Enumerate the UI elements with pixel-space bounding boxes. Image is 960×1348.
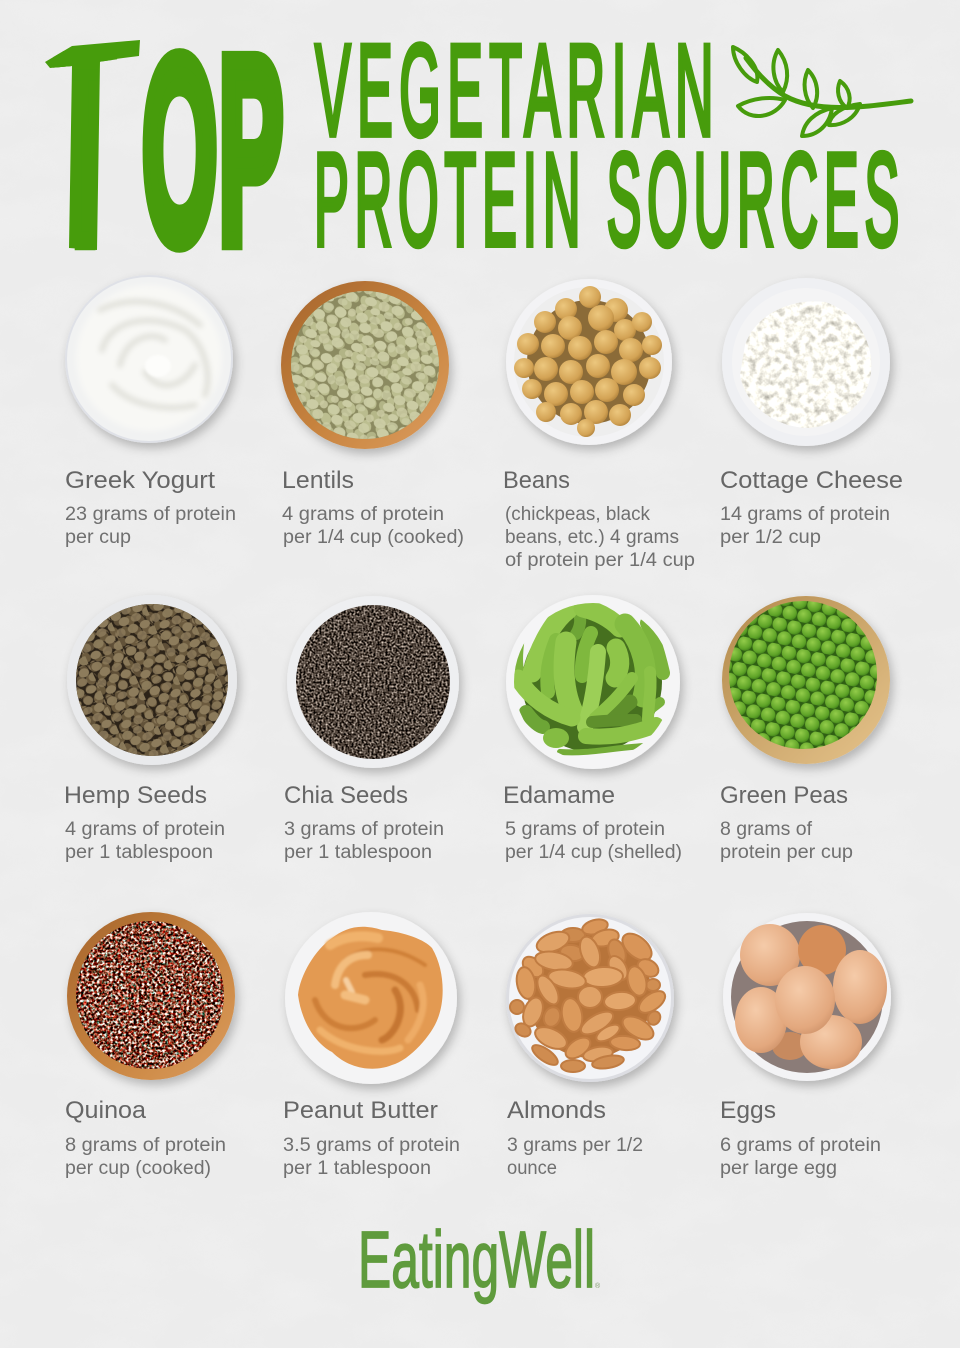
heading: Hemp Seeds: [64, 782, 207, 809]
heading: Almonds: [507, 1097, 606, 1124]
panel: beans: [503, 279, 695, 571]
logo: EatingWell: EatingWell: [358, 1215, 595, 1304]
heading: Cottage Cheese: [720, 467, 903, 494]
description: per cup (cooked): [65, 1158, 211, 1179]
heading: Lentils: [282, 467, 354, 494]
heading: Green Peas: [720, 782, 848, 809]
description: per 1/2 cup: [720, 527, 821, 548]
icon: bowl of almonds: [506, 914, 674, 1082]
description: 6 grams of protein: [720, 1135, 881, 1156]
T crossbar and stem brush stroke: [45, 40, 140, 250]
panel: green peas: [720, 596, 890, 863]
description: per 1 tablespoon: [65, 842, 213, 863]
heading: Chia Seeds: [284, 782, 408, 809]
heading: Quinoa: [65, 1097, 147, 1124]
icon: bowl of chickpeas: [506, 279, 672, 445]
description: (chickpeas, black: [505, 504, 650, 525]
logo: EatingWell: [358, 1215, 601, 1304]
icon: bowl of hemp seeds: [67, 595, 237, 765]
description: per cup: [65, 527, 131, 548]
description: 5 grams of protein: [505, 819, 665, 840]
description: 8 grams of protein: [65, 1135, 226, 1156]
panel: lentils: [281, 281, 464, 548]
icon: bowl of edamame: [506, 595, 680, 769]
icon: bowl of peanut butter: [285, 912, 457, 1084]
heading: Edamame: [503, 782, 615, 809]
description: per 1 tablespoon: [283, 1158, 431, 1179]
description: per 1/4 cup (cooked): [283, 527, 464, 548]
description: 4 grams of protein: [282, 504, 444, 525]
description: 3 grams of protein: [284, 819, 444, 840]
panel: hemp seeds: [64, 595, 237, 863]
description: per large egg: [720, 1158, 837, 1179]
description: ounce: [507, 1158, 557, 1179]
description: 3 grams per 1/2: [507, 1135, 643, 1156]
panel: greek yogurt: [65, 275, 236, 548]
heading: Beans: [503, 467, 570, 494]
description: beans, etc.) 4 grams: [505, 527, 679, 548]
description: per 1/4 cup (shelled): [505, 842, 682, 863]
icon: wooden bowl of quinoa: [67, 912, 235, 1080]
icon: bowl of cottage cheese: [722, 278, 890, 446]
description: 3.5 grams of protein: [283, 1135, 460, 1156]
icon: wooden bowl of lentils: [281, 281, 449, 449]
panel: edamame: [503, 595, 682, 863]
icon: bowl of yogurt: [65, 275, 233, 443]
panel: eggs: [720, 913, 891, 1179]
description: 14 grams of protein: [720, 504, 890, 525]
panel: peanut butter: [283, 912, 460, 1179]
panel: quinoa: [65, 912, 235, 1179]
description: 8 grams of: [720, 819, 813, 840]
panel: cottage cheese: [720, 278, 903, 548]
description: of protein per 1/4 cup: [505, 550, 695, 571]
title word: Top: TOP: [55, 5, 283, 298]
description: protein per cup: [720, 842, 853, 863]
description: per 1 tablespoon: [284, 842, 432, 863]
title: [45, 5, 911, 298]
panel: chia seeds: [284, 596, 459, 863]
icon: leaf sprig: [733, 47, 911, 136]
description: 4 grams of protein: [65, 819, 225, 840]
icon: bowl of eggs: [723, 913, 891, 1081]
panel: almonds: [506, 914, 674, 1179]
description: 23 grams of protein: [65, 504, 236, 525]
heading: Peanut Butter: [283, 1097, 438, 1124]
logo: EatingWell: ®: [595, 1282, 601, 1290]
heading: Greek Yogurt: [65, 467, 215, 494]
heading: Eggs: [720, 1097, 776, 1124]
icon: bowl of chia seeds: [287, 596, 459, 768]
icon: bowl of green peas: [722, 596, 890, 764]
